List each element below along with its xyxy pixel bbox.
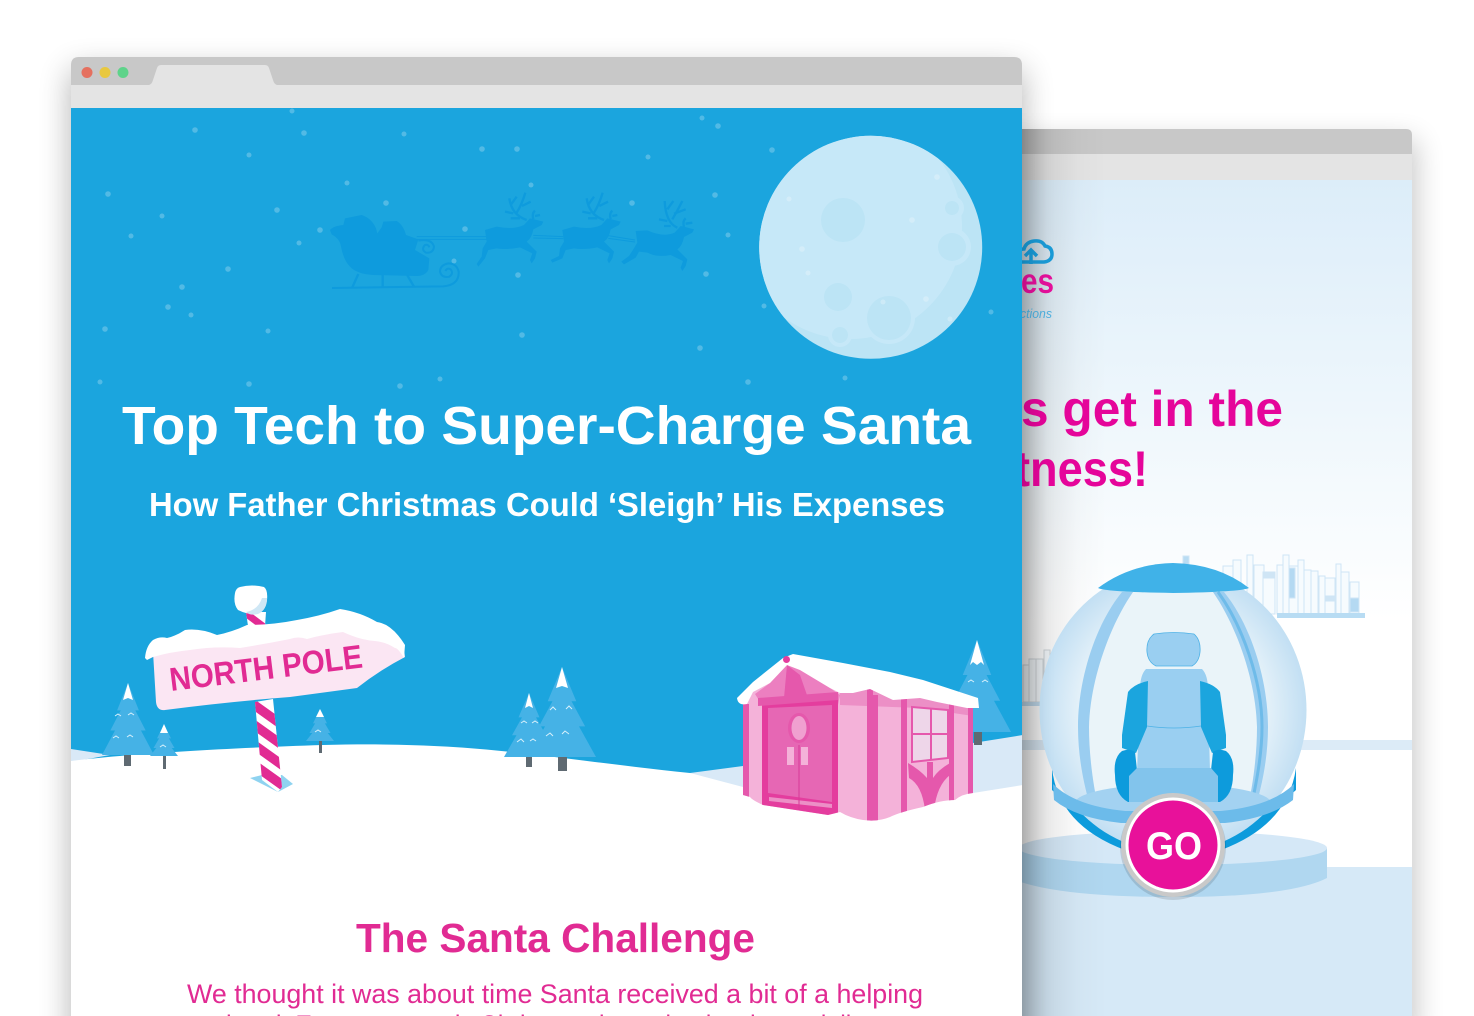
house window [912, 707, 948, 762]
chair left bolster [1122, 681, 1148, 753]
moon craters [821, 196, 971, 347]
panel: main browser window [71, 57, 1023, 1016]
pod left rib [1078, 592, 1133, 812]
tree: right of sign [306, 709, 334, 753]
chair left arm [1115, 750, 1137, 802]
browser tab [149, 65, 277, 85]
GO button: GO [1146, 825, 1202, 868]
house door seam [798, 745, 800, 810]
house roof snow [737, 654, 979, 708]
snowflakes [98, 108, 994, 389]
background snow hill right [690, 735, 1023, 800]
chair back [1137, 669, 1210, 772]
panel: back browser window [1022, 129, 1412, 1016]
GO button [1120, 793, 1226, 900]
house door window [788, 713, 810, 743]
pod sphere [1040, 589, 1306, 841]
shelf right [1277, 613, 1365, 618]
background snow patch left [71, 749, 110, 762]
tree: centre small [504, 693, 554, 767]
pole lower [250, 695, 290, 807]
chair right arm [1211, 750, 1233, 802]
house door handles [787, 747, 808, 765]
heading line two: tness! [1015, 441, 1148, 497]
house gable shade [755, 665, 840, 705]
back window title bar [1022, 129, 1412, 154]
pod right rib shade [1218, 592, 1262, 812]
reindeer two [551, 193, 621, 263]
sign snow [145, 609, 405, 660]
house wall fill [740, 655, 980, 825]
shelf left [1022, 702, 1040, 706]
heading line one: s get in the [1021, 381, 1283, 437]
floor [1022, 867, 1412, 1016]
house door [768, 705, 832, 802]
title bar [71, 57, 1022, 85]
reindeer one [477, 193, 543, 267]
sky [71, 108, 1022, 808]
body text line one: We thought it was about time Santa received a bit of a helping [187, 979, 923, 1009]
house eave shade [840, 688, 973, 716]
pod base bowl [1052, 768, 1296, 850]
pod chair [1040, 563, 1306, 852]
sign text: NORTH POLE [167, 638, 364, 698]
pole snow cap shade [246, 598, 267, 615]
house door step [769, 797, 832, 808]
house gable centre [784, 665, 808, 698]
house wall posts [743, 689, 973, 824]
pod right rib [1213, 592, 1268, 812]
title: Top Tech to Super-Charge Santa [122, 396, 972, 456]
house lintel [758, 692, 838, 706]
chair headrest [1147, 632, 1200, 666]
bookshelf left [1023, 650, 1050, 702]
shade from front window [1022, 129, 1070, 1016]
section heading: The Santa Challenge [356, 915, 755, 961]
tree: centre large [528, 667, 596, 771]
chair right bolster [1200, 681, 1226, 753]
pole hole shadow [250, 775, 293, 792]
tree: left small [150, 724, 178, 769]
address bar [71, 85, 1022, 108]
tree snow marks [113, 680, 988, 747]
house [737, 654, 980, 825]
tree: far right [943, 640, 1011, 745]
sleigh and reindeer silhouette [330, 193, 694, 288]
pole upper [244, 610, 268, 630]
moon [738, 115, 982, 359]
back window shadow [1000, 140, 1416, 1016]
sleigh [330, 215, 635, 288]
back window page background [1022, 180, 1412, 620]
bookshelf right [1183, 555, 1359, 614]
pod ring [1053, 784, 1294, 823]
house door frame [762, 698, 838, 820]
main window shadow [71, 70, 1022, 1016]
signpost [145, 586, 405, 807]
snow ground [71, 744, 1023, 1016]
pole snow cap [234, 586, 267, 614]
tree: left large [102, 683, 154, 766]
chair seat [1129, 768, 1218, 802]
house window brace [908, 762, 950, 810]
pod canopy [1098, 563, 1249, 593]
back window lower wall [1022, 620, 1412, 867]
chair back seam [1147, 726, 1201, 728]
pod floor disc [1076, 788, 1270, 811]
sign board [153, 625, 405, 710]
subtitle: How Father Christmas Could ‘Sleigh’ His Expenses [149, 486, 945, 523]
window buttons [82, 67, 128, 78]
logo text: es [1021, 262, 1054, 301]
house door window glass [792, 716, 806, 740]
house roof finial [783, 656, 790, 663]
house walls [740, 655, 980, 825]
logo tagline: ctions [1020, 306, 1052, 321]
reindeer three [621, 201, 694, 271]
pedestal [1015, 831, 1327, 897]
moon specks [786, 174, 952, 322]
pod inner cabin [1092, 592, 1254, 792]
icon: cloud logo [1016, 241, 1052, 264]
moon light face [738, 115, 962, 339]
back window address bar [1022, 154, 1411, 180]
wall rail [1022, 740, 1412, 750]
